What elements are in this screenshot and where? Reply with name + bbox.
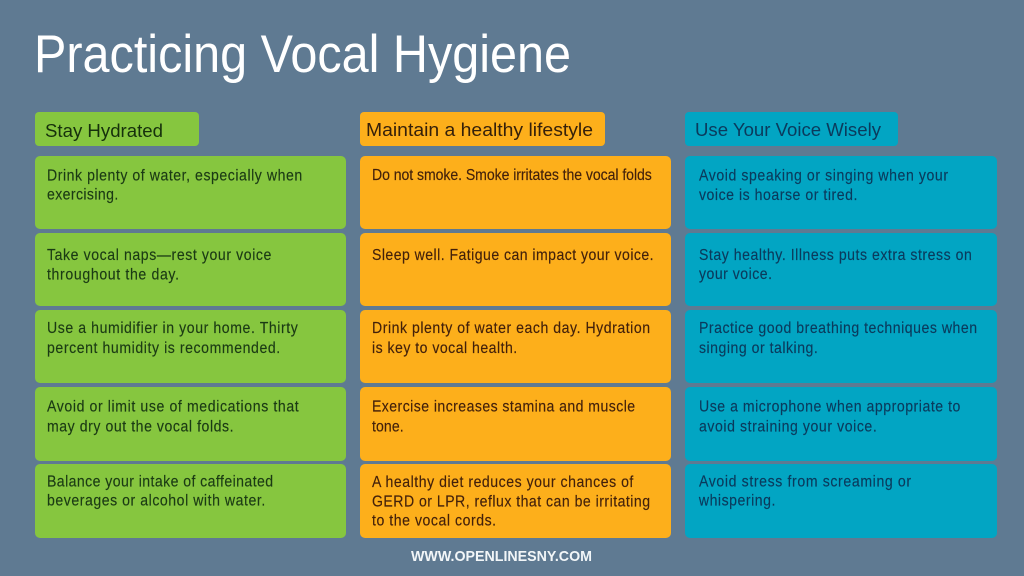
card: caffeine: beverages or alcohol with water.	[47, 492, 265, 510]
panel: healthy lifestyle	[360, 112, 671, 538]
card: smoke	[360, 156, 671, 229]
heading: stay hydrated	[35, 112, 199, 146]
card: vocal naps: Take vocal naps—rest your voice	[47, 246, 271, 264]
card: exercise: Exercise increases stamina and muscle	[372, 398, 635, 416]
card: humidifier	[35, 310, 346, 383]
card: hydration: Drink plenty of water each day. Hydration	[372, 319, 650, 337]
title: Practicing Vocal Hygiene	[34, 25, 571, 84]
card: stay healthy	[685, 233, 997, 306]
panel: use your voice wisely	[685, 112, 997, 538]
card: microphone	[685, 387, 997, 461]
card: hoarse: voice is hoarse or tired.	[699, 186, 857, 204]
card: hoarse: Avoid speaking or singing when your	[699, 167, 948, 185]
heading: healthy lifestyle	[360, 112, 605, 146]
card: sleep	[360, 233, 671, 306]
card: sleep: Sleep well. Fatigue can impact your voice.	[372, 246, 654, 264]
card: diet: A healthy diet reduces your chances of	[372, 473, 634, 491]
card: microphone: avoid straining your voice.	[699, 418, 877, 436]
card: hoarse	[685, 156, 997, 229]
card: breathing: singing or talking.	[699, 339, 818, 357]
card: exercise: tone.	[372, 418, 404, 436]
heading: stay hydrated: Stay Hydrated	[45, 120, 163, 141]
card: medications	[35, 387, 346, 461]
card: breathing: Practice good breathing techniques when	[699, 319, 977, 337]
card: exercise	[360, 387, 671, 461]
card: stay healthy: your voice.	[699, 265, 772, 283]
footer url: WWW.OPENLINESNY.COM	[411, 548, 592, 565]
card: stay healthy: Stay healthy. Illness puts extra stress on	[699, 246, 972, 264]
card: vocal naps	[35, 233, 346, 306]
card: drink water: Drink plenty of water, especially when	[47, 167, 302, 185]
heading: use your voice wisely: Use Your Voice Wisely	[695, 119, 882, 140]
card: caffeine: Balance your intake of caffeinated	[47, 473, 273, 491]
panel: stay hydrated	[35, 112, 346, 538]
card: hydration	[360, 310, 671, 383]
card: stress: whispering.	[698, 492, 775, 510]
card: stress: Avoid stress from screaming or	[699, 473, 911, 491]
card: medications: Avoid or limit use of medications that	[47, 398, 299, 416]
card: vocal naps: throughout the day.	[47, 266, 179, 284]
card: humidifier: percent humidity is recommended.	[47, 339, 280, 357]
card: smoke: Do not smoke. Smoke irritates the vocal folds	[372, 166, 652, 184]
card: diet: to the vocal cords.	[372, 512, 496, 530]
card: breathing	[685, 310, 997, 383]
card: diet: GERD or LPR, reflux that can be irritating	[372, 493, 650, 511]
card: hydration: is key to vocal health.	[372, 339, 517, 357]
card: drink water	[35, 156, 346, 229]
card: diet	[360, 464, 671, 538]
card: caffeine	[35, 464, 346, 538]
card: stress	[685, 464, 997, 538]
card: humidifier: Use a humidifier in your home. Thirty	[47, 319, 298, 337]
heading: use your voice wisely	[685, 112, 898, 146]
heading: healthy lifestyle: Maintain a healthy lifestyle	[366, 119, 593, 140]
card: medications: may dry out the vocal folds.	[47, 418, 234, 436]
card: drink water: exercising.	[47, 186, 118, 204]
card: microphone: Use a microphone when appropriate to	[699, 398, 960, 416]
